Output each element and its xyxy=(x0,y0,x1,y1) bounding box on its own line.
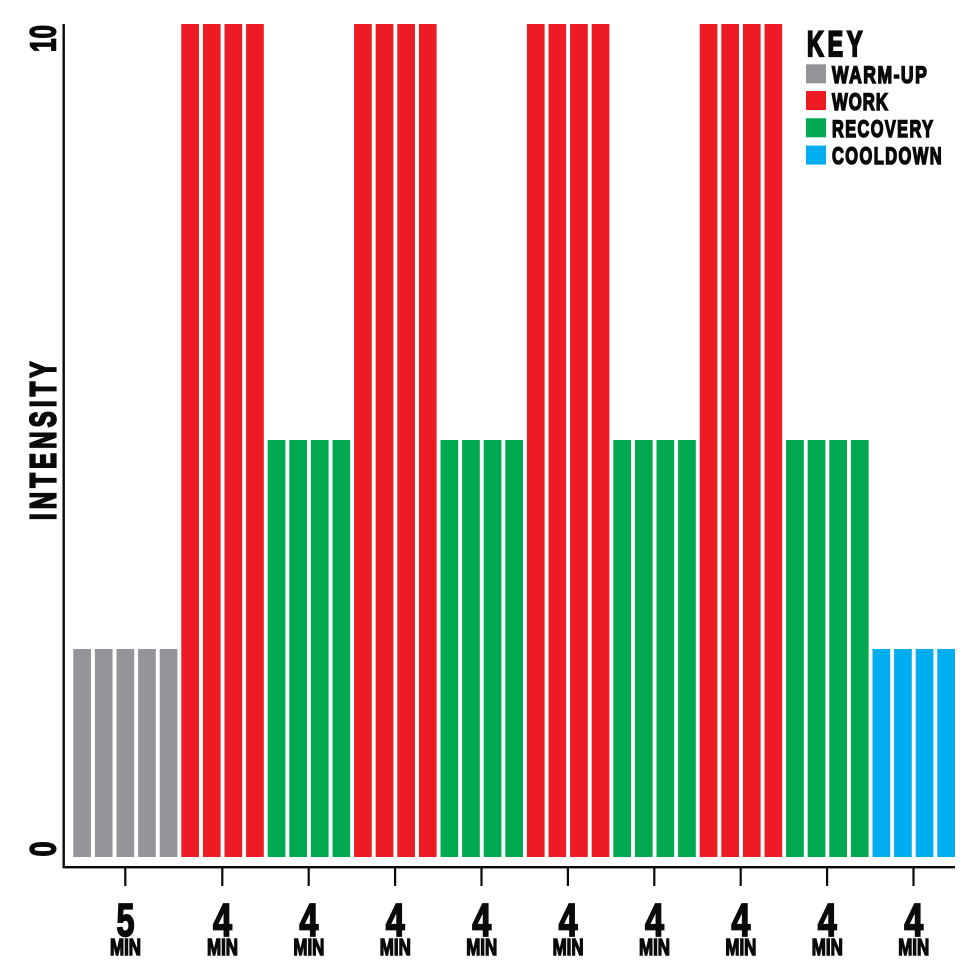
duration labels: 5 xyxy=(116,894,134,946)
duration labels xyxy=(110,894,929,960)
y axis label 0: 0 xyxy=(22,842,64,856)
duration labels: MIN xyxy=(207,934,238,960)
legend title: KEY xyxy=(807,25,866,64)
duration labels: MIN xyxy=(466,934,497,960)
duration labels: 4 xyxy=(731,894,751,946)
warm-up bars xyxy=(73,649,177,857)
legend labels: WARM-UP xyxy=(832,62,928,89)
duration labels: MIN xyxy=(553,934,584,960)
duration labels: 4 xyxy=(904,894,924,946)
duration labels: MIN xyxy=(898,934,929,960)
work bars xyxy=(181,24,782,857)
duration labels: 4 xyxy=(299,894,319,946)
duration labels: MIN xyxy=(380,934,411,960)
duration labels: 4 xyxy=(559,894,578,946)
y axis title: INTENSITY xyxy=(24,357,64,520)
recovery bars xyxy=(268,440,869,857)
duration labels: 4 xyxy=(472,894,492,946)
duration labels: 4 xyxy=(213,894,232,946)
legend labels: WORK xyxy=(832,89,889,116)
legend swatches xyxy=(806,64,826,165)
duration labels: MIN xyxy=(812,934,843,960)
duration labels: MIN xyxy=(725,934,756,960)
legend labels xyxy=(832,62,943,170)
duration labels: MIN xyxy=(639,934,670,960)
cooldown bars xyxy=(872,649,955,857)
y axis label 10: 10 xyxy=(22,25,64,52)
legend labels: RECOVERY xyxy=(832,116,934,143)
duration labels: 4 xyxy=(645,894,664,946)
legend labels: COOLDOWN xyxy=(832,143,943,170)
legend xyxy=(806,25,943,170)
duration labels: 4 xyxy=(818,894,837,946)
duration labels: MIN xyxy=(110,934,141,960)
duration labels: MIN xyxy=(293,934,324,960)
duration labels: 4 xyxy=(386,894,405,946)
